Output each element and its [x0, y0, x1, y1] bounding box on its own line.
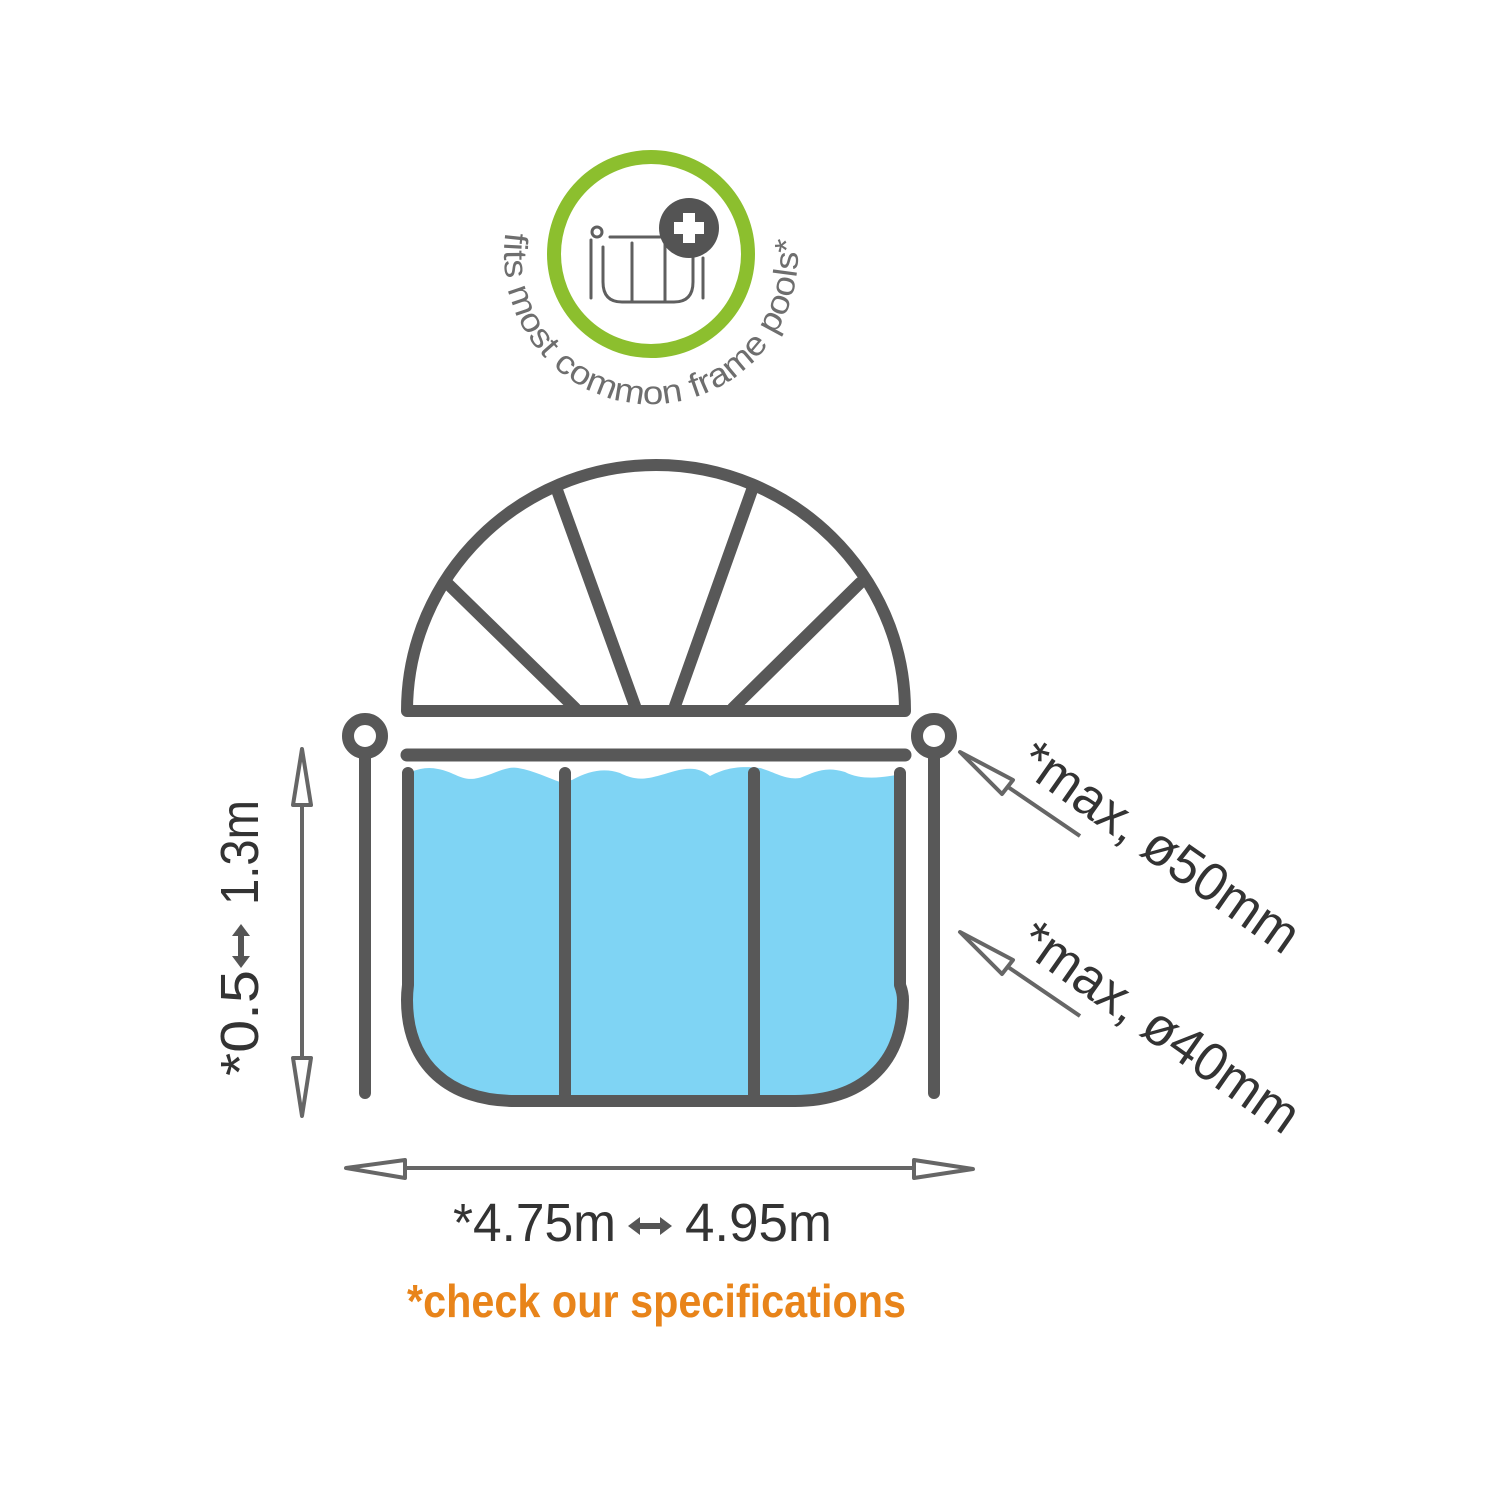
- height label: [210, 800, 270, 1076]
- width arrow: [346, 1160, 973, 1178]
- label: max 40mm: *max, ø40mm: [1009, 909, 1311, 1145]
- icon: small double arrow: [232, 924, 250, 968]
- height label: 1.3m: [210, 800, 270, 905]
- right post: [917, 719, 951, 1093]
- dome frame: [407, 465, 905, 711]
- badge ring: [554, 157, 748, 351]
- icon: small pool: [591, 227, 703, 302]
- label: max 50mm: *max, ø50mm: [1009, 729, 1311, 965]
- width label: 4.95m: [685, 1193, 832, 1253]
- height label: *0.5: [210, 970, 270, 1076]
- left post: [348, 719, 382, 1093]
- pool water: [410, 767, 900, 1100]
- note: check our specifications: *check our specifications: [407, 1275, 906, 1327]
- badge caption: fits most common frame pools*: [504, 234, 798, 404]
- width label: [453, 1193, 832, 1253]
- height arrow: [293, 749, 311, 1116]
- pool top rail: [407, 748, 905, 762]
- icon: plus circle: [659, 198, 719, 258]
- arrow: upright diameter: [960, 932, 1080, 1016]
- icon: small double arrow: [628, 1217, 672, 1235]
- badge: fits most common frame pools: [504, 150, 798, 404]
- pool frame: [407, 773, 903, 1101]
- arrow: top rail diameter: [960, 752, 1080, 836]
- width label: *4.75m: [453, 1193, 616, 1253]
